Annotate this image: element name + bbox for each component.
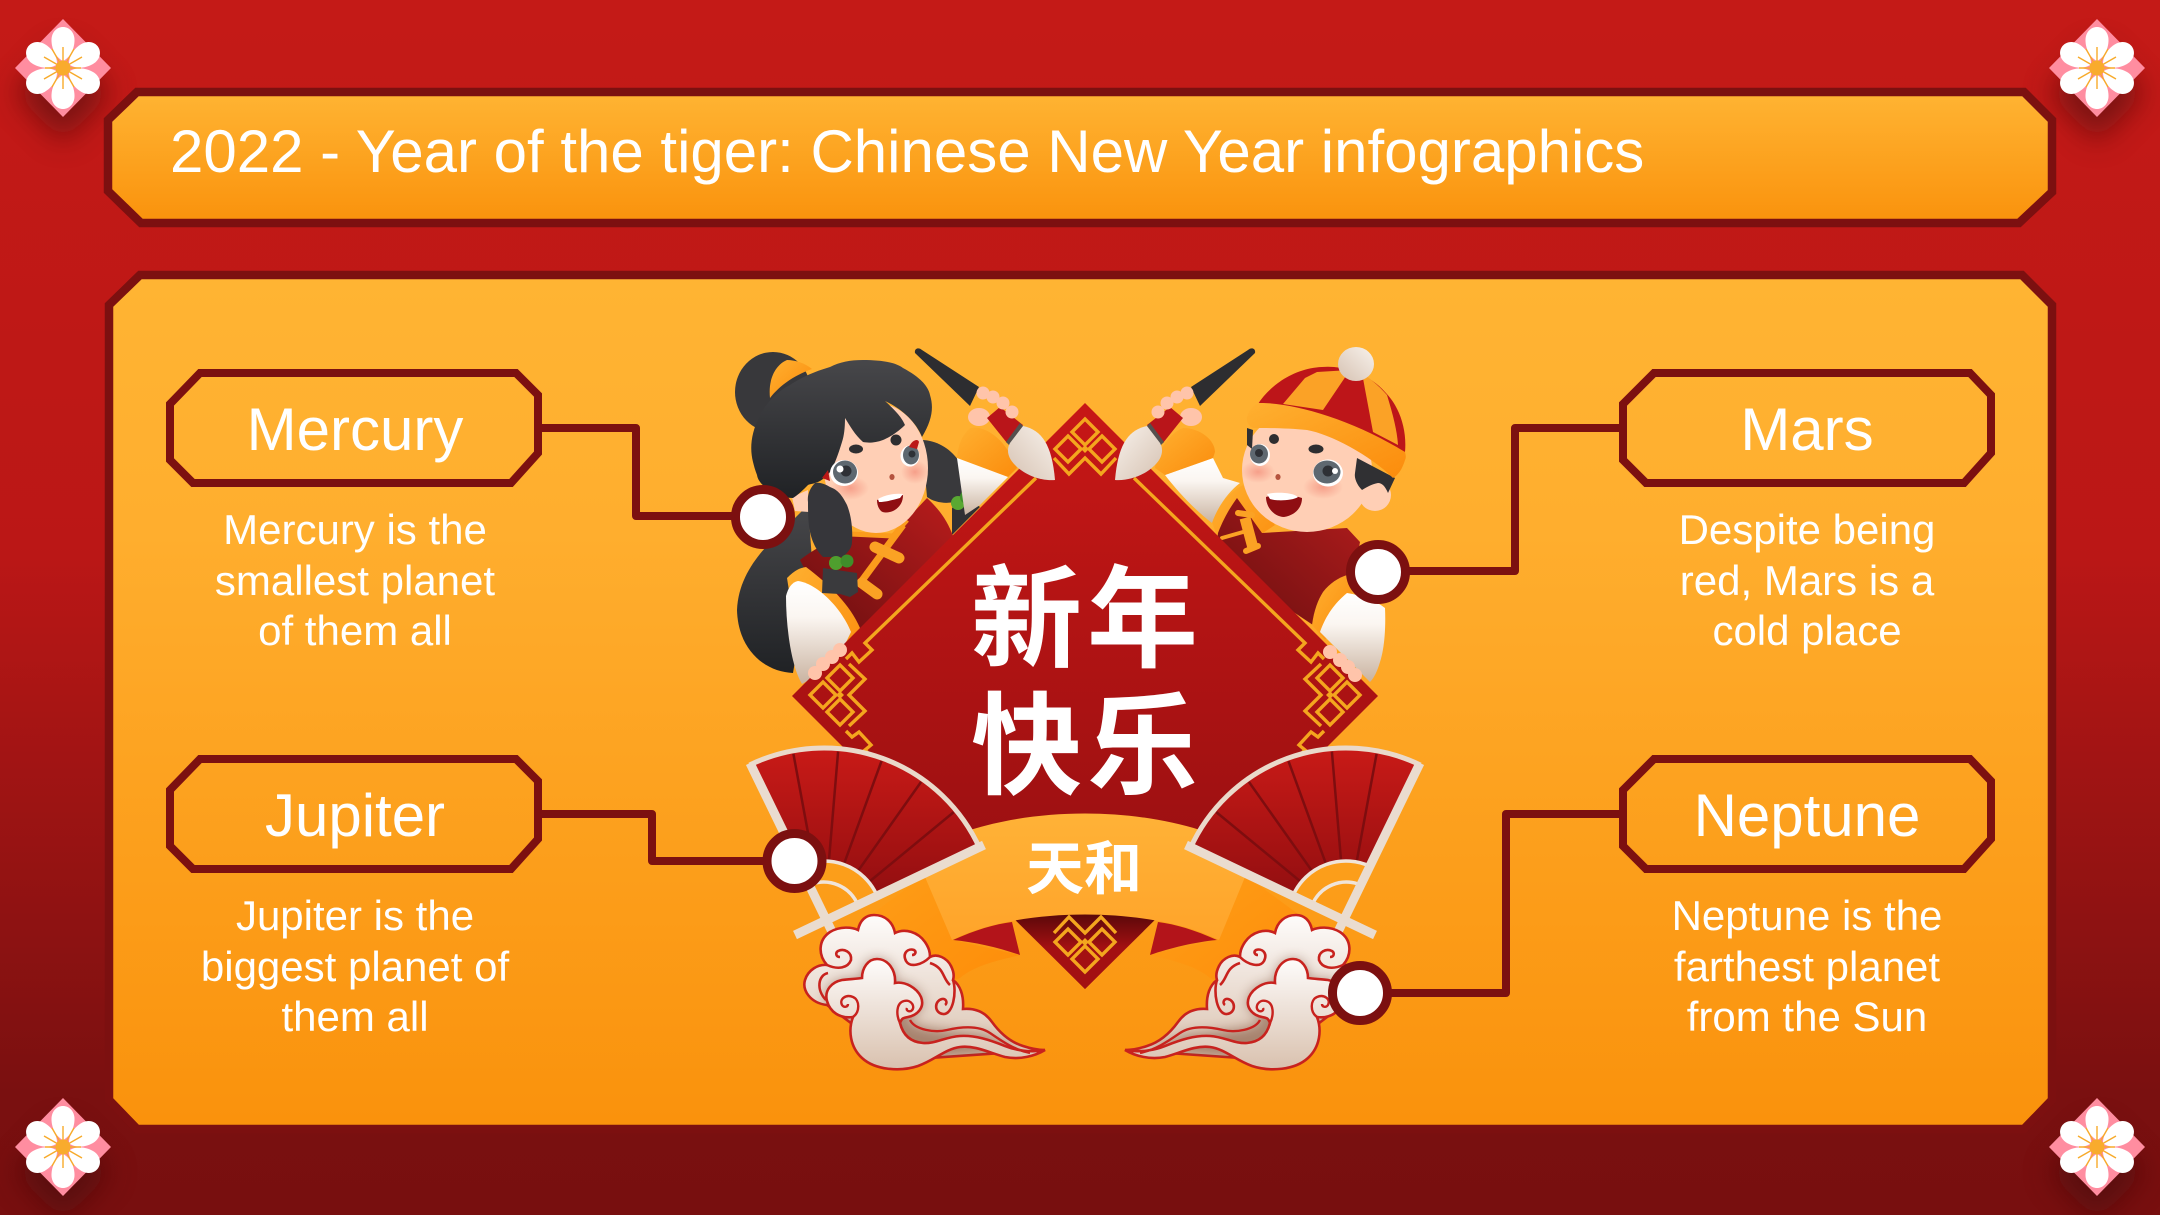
title: 2022 - Year of the tiger: Chinese New Year infographics: [170, 118, 1644, 185]
ribbon text: 天和: 天和: [1026, 837, 1142, 902]
Mars label box: [1623, 373, 1991, 483]
panel: Neptune: [1623, 759, 1991, 1040]
node: Neptune connector: [1332, 966, 1388, 1020]
main content panel: [109, 275, 2052, 1129]
panel: Mercury: [170, 373, 538, 654]
Mercury description: Mercury is the: [223, 506, 487, 553]
Mercury name: Mercury: [247, 396, 463, 463]
icon: bottom-right flower: [2049, 1098, 2145, 1215]
shaded bottom tip: [1000, 905, 1170, 989]
connector: Mars: [1400, 428, 1620, 571]
Mercury label box: [170, 373, 538, 483]
ornamental knots: [810, 419, 1360, 972]
Jupiter description: biggest planet of: [201, 943, 509, 990]
Mercury description: of them all: [258, 607, 452, 654]
Neptune description: farthest planet: [1674, 943, 1940, 990]
Neptune description: Neptune is the: [1672, 892, 1942, 939]
left fan: [750, 748, 984, 938]
right fan: [1186, 748, 1420, 938]
node: Mars connector: [1350, 544, 1406, 600]
panel: Jupiter: [170, 759, 538, 1040]
diamond gold frame: [846, 478, 1324, 795]
boy hand and brush: [1115, 348, 1362, 682]
Jupiter label box: [170, 759, 538, 869]
title banner: [108, 92, 2052, 223]
icon: bottom-left flower: [15, 1098, 111, 1215]
Mars description: cold place: [1712, 607, 1902, 654]
left cloud: [804, 915, 1045, 1069]
banner text: 新年快乐: 新年: [971, 558, 1203, 682]
connector: Jupiter: [542, 814, 770, 861]
ribbon: [850, 814, 1320, 1000]
Mars description: Despite being: [1679, 506, 1935, 553]
Jupiter description: them all: [281, 993, 429, 1040]
character: boy: [1155, 347, 1406, 682]
Neptune description: from the Sun: [1687, 993, 1927, 1040]
connector: Mercury: [542, 428, 740, 516]
banner text: 新年快乐: [971, 558, 1203, 809]
icon: top-left flower: [15, 19, 111, 142]
Neptune name: Neptune: [1694, 782, 1920, 849]
character: girl: [735, 352, 1017, 684]
illustration: new year scene: [735, 347, 1420, 1069]
banner: red diamond: [792, 403, 1378, 989]
panel: Mars: [1623, 373, 1991, 654]
Mercury description: smallest planet: [215, 557, 495, 604]
icon: top-right flower: [2049, 19, 2145, 142]
girl hand and brush: [808, 348, 1055, 680]
Mars name: Mars: [1740, 396, 1874, 463]
node: Jupiter connector: [767, 834, 822, 888]
node: Mercury connector: [736, 490, 790, 544]
Neptune label box: [1623, 759, 1991, 869]
Jupiter description: Jupiter is the: [236, 892, 474, 939]
connector: Neptune: [1385, 814, 1620, 993]
Mars description: red, Mars is a: [1680, 557, 1935, 604]
banner text: 新年快乐: 快乐: [971, 685, 1203, 809]
right cloud: [1125, 915, 1366, 1069]
Jupiter name: Jupiter: [265, 782, 445, 849]
